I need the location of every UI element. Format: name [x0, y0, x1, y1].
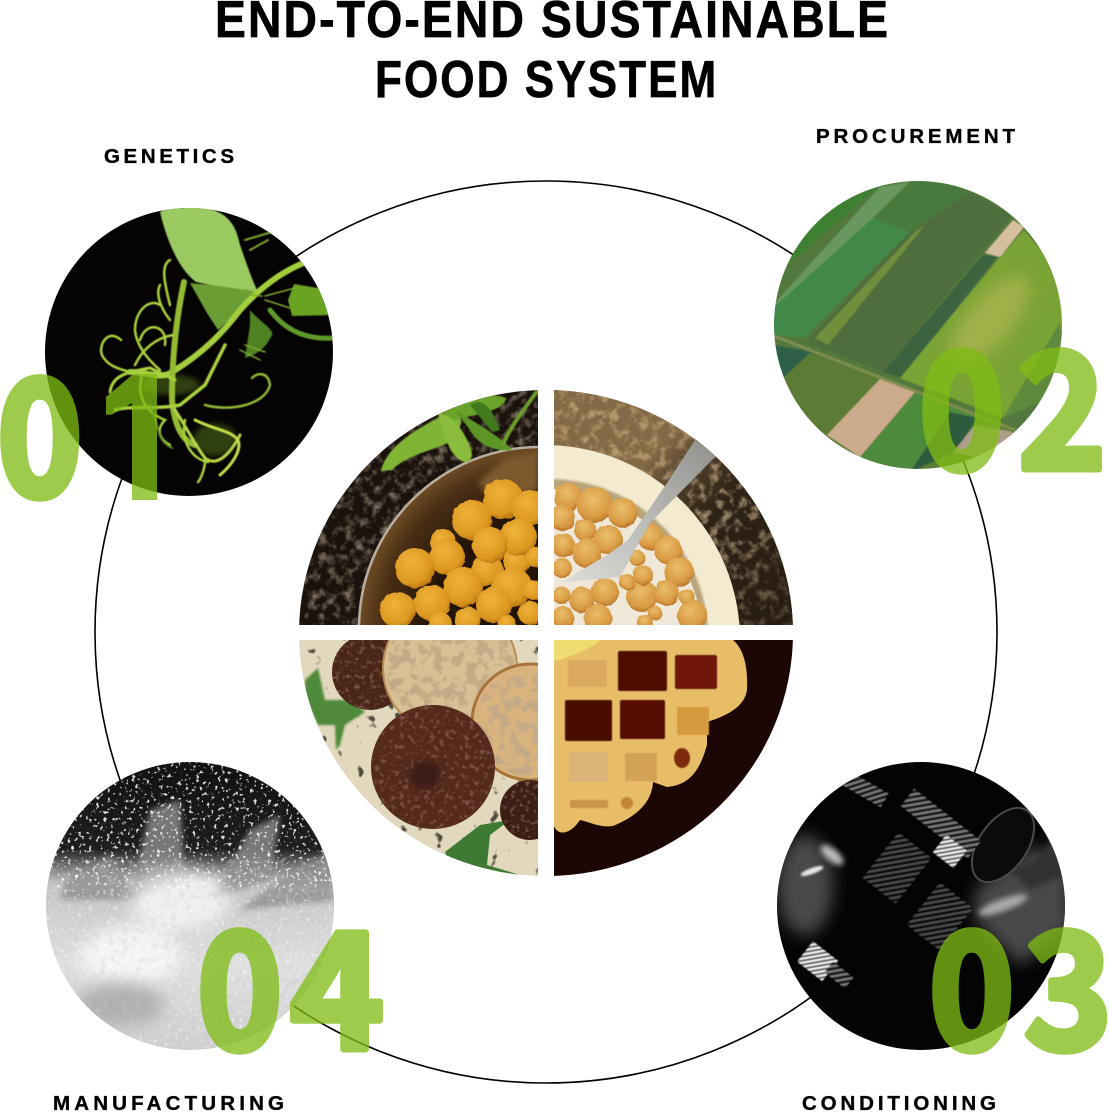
quadrant: waffle — [554, 640, 802, 885]
grates — [797, 769, 981, 989]
center food plate — [290, 380, 802, 885]
right pipe — [975, 845, 1070, 965]
flour plumes — [60, 800, 340, 910]
puffs in milk — [549, 483, 707, 632]
title: FOOD SYSTEM — [375, 51, 718, 109]
quadrant: cereal puffs in steel bowl — [299, 390, 538, 625]
butter — [554, 640, 600, 660]
number 03 — [929, 863, 1109, 1096]
number 01 — [0, 374, 157, 502]
number 03: 0 — [929, 863, 1015, 1096]
number 04 — [197, 863, 384, 1096]
fan ring — [970, 807, 1036, 883]
number 02 — [919, 283, 1106, 516]
pea leaves — [381, 390, 538, 471]
quadrant: cereal with milk and spoon — [554, 390, 793, 625]
label: genetics: GENETICS — [104, 145, 234, 168]
cereal bowl — [554, 445, 740, 625]
photo circle 04: flour explosion — [46, 762, 340, 1050]
cereal puffs — [380, 479, 538, 625]
stems and tendrils — [101, 232, 335, 482]
number 02: 0 — [919, 283, 1005, 516]
waffle wells — [565, 651, 717, 809]
photo circle 03: industrial machinery — [777, 762, 1075, 1050]
cookie shapes — [332, 640, 392, 710]
number 02: 2 — [1018, 283, 1106, 516]
spoon — [562, 440, 717, 582]
leaves — [305, 668, 365, 750]
left duct — [777, 835, 833, 935]
title — [215, 0, 890, 109]
bowl — [358, 446, 538, 625]
number 04: 0 — [197, 863, 283, 1096]
photo circle 02: aerial farm fields — [774, 181, 1062, 469]
quadrant: cookies — [299, 640, 538, 876]
waffle body — [554, 640, 747, 833]
number 01: 1 — [82, 312, 201, 545]
connecting ring — [95, 181, 997, 1083]
number 04: 4 — [290, 863, 384, 1096]
photo circle 01: pea plant — [45, 206, 335, 496]
label: procurement: PROCUREMENT — [816, 125, 1015, 148]
pea leaf — [160, 206, 335, 358]
